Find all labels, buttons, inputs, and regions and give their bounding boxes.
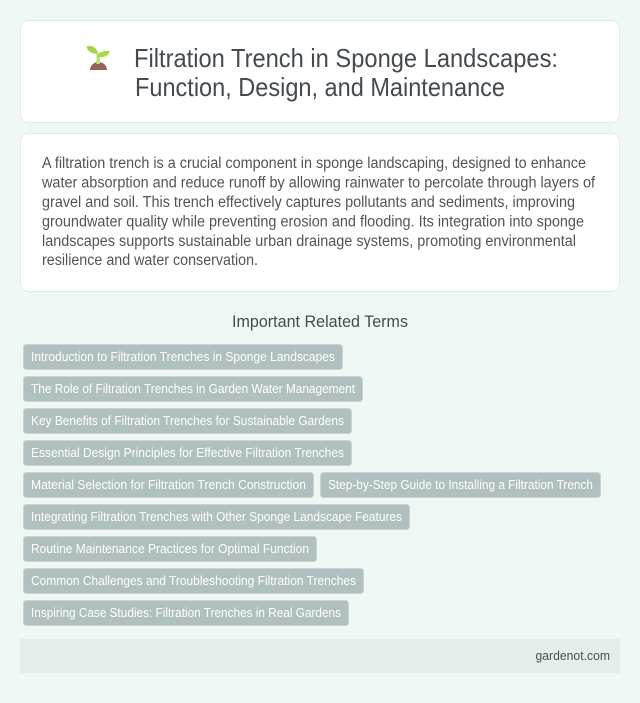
text block: description paragraph: resilience and water conservation.: [42, 252, 258, 269]
tag: integrating: [24, 504, 410, 530]
tag: maintenance: Routine Maintenance Practices for Optimal Function: [31, 541, 309, 556]
tag: step-by-step guide: Step-by-Step Guide to Installing a Filtration Trench: [328, 477, 593, 492]
text block: description paragraph: landscapes supports sustainable urban drainage systems, promoting environmental: [42, 233, 576, 250]
heading: important related terms: Important Related Terms: [232, 313, 408, 331]
heading: title: Function, Design, and Maintenance: [135, 72, 505, 102]
tag: case studies: Inspiring Case Studies: Filtration Trenches in Real Gardens: [31, 605, 341, 620]
tag: benefits: [24, 408, 352, 434]
tag: material selection: [24, 472, 314, 498]
icon: sprout: [86, 46, 110, 70]
text block: description paragraph: gravel and soil. This trench effectively captures pollutants and sediments, improving: [42, 194, 575, 211]
tag: challenges: Common Challenges and Troubleshooting Filtration Trenches: [31, 573, 356, 588]
tag: introduction: [24, 344, 342, 370]
panel: description: [20, 134, 620, 292]
tag: step-by-step guide: [320, 472, 600, 498]
tag: challenges: [24, 568, 364, 594]
tag list: related terms: [24, 344, 600, 626]
text block: description paragraph: A filtration trench is a crucial component in sponge landscaping, designed to enhance: [42, 155, 586, 172]
text block: description paragraph: [41, 155, 596, 269]
text block: description paragraph: water absorption and reduce runoff by allowing rainwater to percolate through layers of: [41, 174, 596, 192]
footer: [20, 639, 620, 673]
tag: case studies: [24, 600, 348, 626]
heading: title: Filtration Trench in Sponge Landscapes:: [134, 43, 558, 73]
panel: title card: [20, 20, 620, 122]
tag: role: The Role of Filtration Trenches in Garden Water Management: [31, 381, 355, 396]
text block: description paragraph: groundwater quality while preventing erosion and flooding. Its integration into sponge: [42, 214, 584, 230]
tag: benefits: Key Benefits of Filtration Trenches for Sustainable Gardens: [31, 413, 344, 428]
tag: maintenance: [24, 536, 316, 562]
footer: gardenot.com: [536, 648, 610, 663]
heading: title: [134, 43, 558, 102]
tag: introduction: Introduction to Filtration Trenches in Sponge Landscapes: [31, 349, 335, 364]
tag: integrating: Integrating Filtration Trenches with Other Sponge Landscape Features: [31, 509, 402, 524]
tag: design principles: Essential Design Principles for Effective Filtration Trenches: [31, 445, 344, 460]
tag: material selection: Material Selection for Filtration Trench Construction: [31, 477, 306, 492]
tag: role: [24, 376, 362, 402]
tag: design principles: [24, 440, 352, 466]
